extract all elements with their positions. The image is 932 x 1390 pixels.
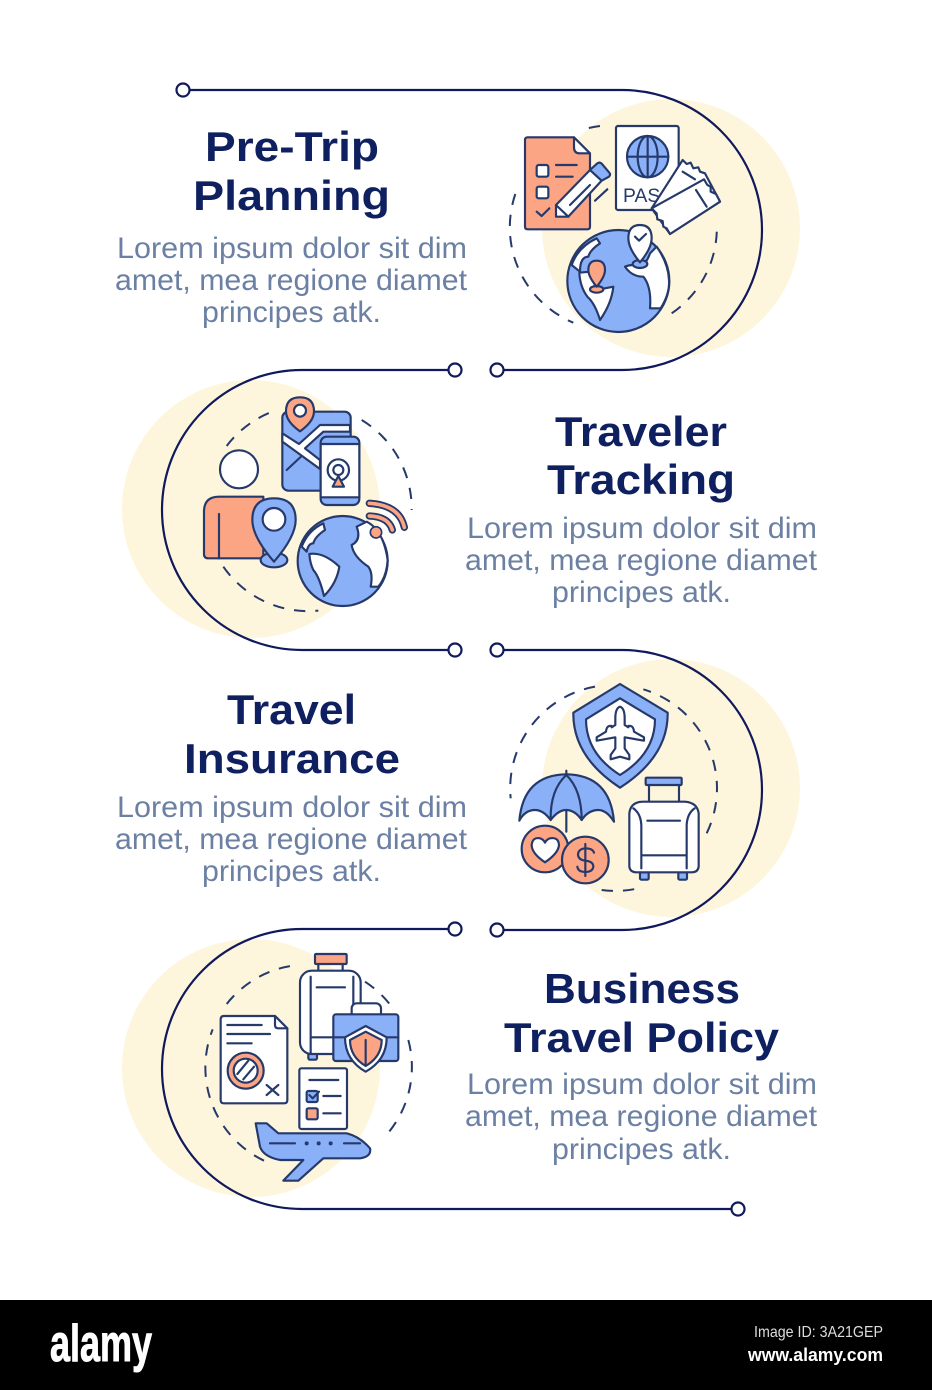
heading: travel insurance bbox=[184, 686, 400, 782]
body text: travel insurance: amet, mea regione diamet bbox=[115, 823, 467, 856]
panel: traveler tracking bbox=[204, 397, 817, 611]
body text: travel insurance bbox=[115, 791, 467, 888]
body text: traveler tracking: principes atk. bbox=[552, 576, 731, 609]
panel: travel insurance bbox=[115, 684, 717, 891]
body text: travel insurance: principes atk. bbox=[202, 855, 381, 888]
body text: pre-trip planning: amet, mea regione diamet bbox=[115, 264, 467, 297]
heading: business travel policy: Business bbox=[544, 965, 740, 1012]
heading: traveler tracking bbox=[547, 408, 735, 503]
heading: traveler tracking: Tracking bbox=[547, 456, 735, 503]
icon: luggage, policy documents and airplane bbox=[205, 954, 412, 1181]
heading: traveler tracking: Traveler bbox=[555, 408, 727, 455]
body text: traveler tracking: amet, mea regione diamet bbox=[465, 544, 817, 577]
logo: alamy: alamy bbox=[50, 1315, 152, 1373]
body text: pre-trip planning bbox=[115, 232, 467, 329]
heading: pre-trip planning: Pre-Trip bbox=[205, 123, 379, 170]
body text: travel insurance: Lorem ipsum dolor sit dim bbox=[117, 791, 467, 824]
heading: travel insurance: Insurance bbox=[184, 735, 400, 782]
heading: travel insurance: Travel bbox=[227, 686, 356, 733]
body text: pre-trip planning: principes atk. bbox=[202, 296, 381, 329]
body text: business travel policy: Lorem ipsum dolor sit dim bbox=[467, 1068, 817, 1101]
website: www.alamy.com bbox=[747, 1345, 883, 1365]
heading: pre-trip planning: Planning bbox=[193, 172, 390, 219]
body text: traveler tracking bbox=[465, 512, 817, 609]
body text: business travel policy: principes atk. bbox=[552, 1133, 731, 1166]
heading: business travel policy: Travel Policy bbox=[504, 1014, 780, 1061]
panel: business travel policy bbox=[205, 954, 817, 1181]
icon: documents, passport, tickets and globe bbox=[510, 126, 720, 332]
image id: Image ID: 3A21GEP bbox=[754, 1324, 883, 1341]
panel: pre-trip planning bbox=[115, 123, 720, 332]
icon: person tracked by map, phone and globe bbox=[204, 397, 412, 611]
heading: business travel policy bbox=[504, 965, 780, 1061]
body text: business travel policy bbox=[465, 1068, 817, 1166]
yellow background circles bbox=[122, 99, 800, 1197]
footer bar bbox=[0, 1300, 932, 1390]
body text: pre-trip planning: Lorem ipsum dolor sit dim bbox=[117, 232, 467, 265]
connector line bbox=[162, 84, 762, 1216]
body text: traveler tracking: Lorem ipsum dolor sit dim bbox=[467, 512, 817, 545]
body text: business travel policy: amet, mea regione diamet bbox=[465, 1100, 817, 1133]
icon: documents, passport, tickets and globe: PAS bbox=[623, 186, 660, 207]
icon: shield, umbrella, money and suitcase bbox=[510, 684, 717, 891]
heading: pre-trip planning bbox=[193, 123, 390, 219]
